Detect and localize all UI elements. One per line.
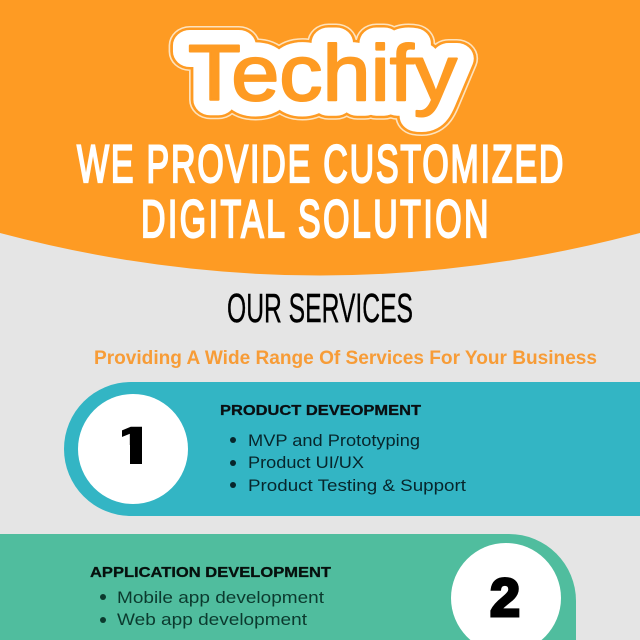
number badge 1 <box>78 394 188 504</box>
panel heading: PRODUCT DEVEOPMENT <box>220 402 421 419</box>
heading: our services: OUR SERVICES <box>227 285 413 331</box>
panel: product development <box>64 382 640 516</box>
panel heading: APPLICATION DEVELOPMENT <box>90 564 331 581</box>
number badge 2: 2 <box>490 568 520 628</box>
panel background: teal <box>64 382 640 516</box>
logo: Techify: Techify <box>188 28 458 117</box>
headline: DIGITAL SOLUTION <box>141 191 489 249</box>
service list: Product UI/UX <box>248 454 364 472</box>
panel: application development <box>0 534 576 640</box>
service list <box>230 432 466 495</box>
service list: MVP and Prototyping <box>248 432 420 450</box>
number badge 2 <box>451 543 561 640</box>
panel background: green <box>0 534 576 640</box>
service list: Product Testing & Support <box>248 477 466 495</box>
service list: Web app development <box>117 611 307 629</box>
logo: Techify: Techify <box>188 28 458 117</box>
number badge 1: 1 <box>111 415 157 476</box>
service list: Mobile app development <box>117 589 324 607</box>
service list <box>100 589 324 629</box>
headline <box>77 136 563 249</box>
logo: Techify: Techify <box>188 28 458 117</box>
headline: WE PROVIDE CUSTOMIZED <box>77 136 563 194</box>
subheading: Providing A Wide Range Of Services For Your Business <box>94 348 597 369</box>
header: orange curved banner <box>0 0 640 276</box>
logo: Techify: Techify <box>188 28 458 117</box>
